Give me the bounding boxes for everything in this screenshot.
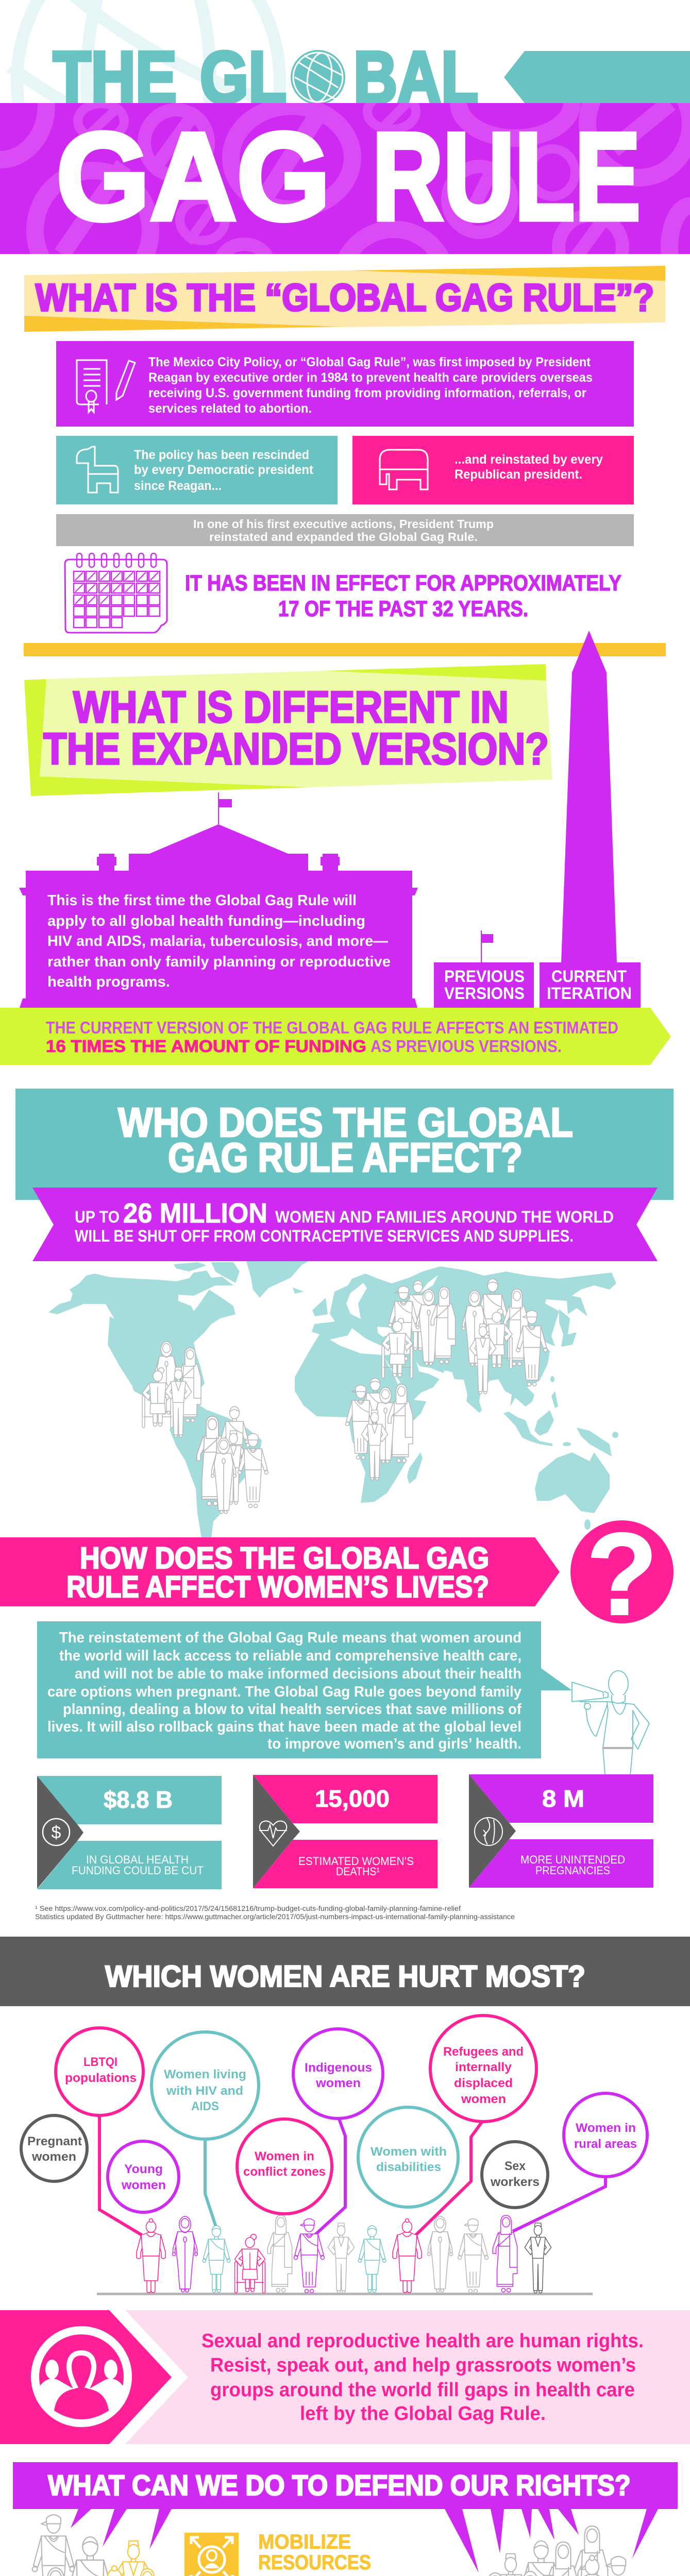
arrow banner: 16 times funding — [0, 1008, 671, 1065]
stat card: pregnancies: 8 M — [542, 1785, 584, 1812]
text: first time: HIV and AIDS, malaria, tuberculosis, and more— — [47, 933, 388, 950]
panel: reinstatement text: and will not be able to make informed decisions about their health — [75, 1666, 521, 1682]
text: reinstated — [455, 452, 603, 482]
icon: donkey — [77, 447, 118, 493]
bubble: lbtqi — [56, 2028, 143, 2115]
bubble: refugees: internally — [455, 2060, 512, 2074]
bubble: hiv: with HIV and — [166, 2084, 243, 2098]
bubble: rural: rural areas — [574, 2137, 637, 2151]
footnote: ¹ See https://www.vox.com/policy-and-politics/2017/5/24/15681216/trump-budget-cuts-funding-global-family-planning-famine-relief — [35, 1904, 461, 1912]
bubble: conflict — [237, 2119, 332, 2214]
text: rescinded — [134, 448, 314, 493]
text: resist speak out: Sexual and reproductive health are human rights. — [201, 2330, 644, 2352]
bubble: pregnant: women — [31, 2150, 76, 2164]
figures: south america — [197, 1406, 268, 1514]
panel: who does it affect: WHO DOES THE GLOBAL — [118, 1099, 573, 1145]
speech banner: what can we do: WHAT CAN WE DO TO DEFEND OUR RIGHTS? — [48, 2469, 631, 2501]
bubble: hiv: AIDS — [191, 2099, 219, 2113]
text: first time — [47, 892, 391, 990]
panel: who does it affect: GAG RULE AFFECT? — [168, 1134, 523, 1180]
figures: asia — [382, 1279, 547, 1394]
arrow banner: how does it affect women's lives — [0, 1537, 560, 1606]
chart: world map with figures — [48, 1261, 618, 1538]
ribbon: 26 million: 26 MILLION — [123, 1198, 267, 1229]
bubble: hiv: Women living — [164, 2067, 246, 2081]
text: resist speak out — [201, 2330, 644, 2425]
stat card: deaths: DEATHS¹ — [336, 1865, 380, 1878]
globe letter O — [291, 50, 345, 105]
figures: gray left group — [32, 2515, 114, 2576]
panel: reinstatement text — [37, 1621, 572, 1758]
bubble: indigenous — [293, 2029, 383, 2119]
text: first time: rather than only family planning or reproductive — [47, 954, 391, 970]
text: mobilize resources — [258, 2531, 426, 2576]
text: resist speak out: left by the Global Gag Rule. — [300, 2403, 546, 2425]
panel: reinstatement text: to improve women’s and girls’ health. — [267, 1736, 521, 1752]
bubble: lbtqi: populations — [65, 2071, 137, 2085]
ribbon tail — [504, 51, 690, 103]
panel: white house building — [19, 792, 418, 1008]
bubble: young: women — [121, 2178, 166, 2192]
heading banner: what is the global gag rule — [24, 266, 665, 332]
chart: obelisk current iteration: CURRENT — [551, 967, 627, 986]
text: 17 of past 32 years — [185, 571, 621, 621]
text: reinstated: ...and reinstated by every — [455, 452, 603, 467]
text: resist speak out: Resist, speak out, and help grassroots women’s — [210, 2354, 636, 2376]
arrow banner: 16 times funding: AS PREVIOUS VERSIONS. — [371, 1037, 562, 1056]
bubble: disabilities — [358, 2107, 458, 2207]
speech banner: what can we do — [13, 2462, 678, 2573]
chart: obelisk current iteration — [540, 631, 641, 1008]
text: reinstated: Republican president. — [455, 467, 582, 482]
stat card: pregnancies: PREGNANCIES — [535, 1864, 610, 1877]
icon: signed document — [77, 360, 135, 412]
banner: human rights — [0, 2310, 690, 2444]
chart: small flag previous versions: VERSIONS — [444, 984, 525, 1003]
bubble: refugees: women — [461, 2092, 506, 2106]
stat card: funding: FUNDING COULD BE CUT — [72, 1864, 204, 1877]
bubble: pregnant — [21, 2115, 87, 2181]
text: first time: apply to all global health funding—including — [47, 913, 365, 929]
ground line — [97, 2293, 593, 2295]
chart: small flag previous versions: PREVIOUS — [444, 967, 525, 986]
bubble: conflict: conflict zones — [243, 2165, 326, 2179]
sign: mobilize resources — [184, 2532, 239, 2576]
icon: elephant — [380, 450, 428, 489]
text: rescinded: The policy has been rescinded — [134, 448, 309, 462]
connectors — [99, 2116, 605, 2235]
panel: democratic presidents — [56, 436, 338, 504]
ribbon: 26 million: WILL BE SHUT OFF FROM CONTRACEPTIVE SERVICES AND SUPPLIES. — [75, 1227, 574, 1245]
text: mobilize resources: MOBILIZE — [258, 2531, 351, 2553]
stat card: pregnancies — [469, 1774, 653, 1888]
chart: obelisk current iteration: ITERATION — [547, 984, 632, 1003]
row of women — [137, 2215, 551, 2293]
figures: north america — [142, 1342, 201, 1437]
icon: dollar — [43, 1819, 70, 1845]
bubble: refugees: Refugees and — [443, 2045, 524, 2059]
ribbon: 26 million: UP TO — [75, 1208, 120, 1226]
bubble: sex workers: workers — [490, 2175, 540, 2189]
bubble: sex workers: Sex — [504, 2159, 526, 2173]
bubble: disabilities: Women with — [371, 2145, 447, 2159]
bubble: refugees — [430, 2015, 536, 2122]
text: rescinded: since Reagan... — [134, 479, 222, 493]
speech spikes — [71, 2509, 658, 2573]
the global letters — [53, 37, 478, 118]
figures: yellow group — [93, 2541, 254, 2576]
text: 17 of past 32 years: IT HAS BEEN IN EFFECT FOR APPROXIMATELY — [185, 571, 621, 596]
stat card: deaths: ESTIMATED WOMEN’S — [298, 1855, 414, 1868]
icon: pregnant belly — [475, 1818, 502, 1845]
heading band: which women are hurt most — [0, 1937, 690, 2006]
bubble: rural — [564, 2093, 647, 2177]
bubble: young: Young — [124, 2162, 163, 2176]
text: rescinded: by every Democratic president — [134, 463, 314, 477]
heading banner: what is different: THE EXPANDED VERSION? — [43, 724, 549, 774]
text: 17 of past 32 years: 17 OF THE PAST 32 YEARS. — [278, 597, 528, 621]
bubble: indigenous: women — [315, 2076, 361, 2090]
icon: question mark — [570, 1509, 674, 1640]
text: policy description — [148, 355, 593, 416]
footnote — [35, 1904, 515, 1921]
text: mobilize resources: RESOURCES — [258, 2551, 371, 2574]
stat card: funding: IN GLOBAL HEALTH — [86, 1853, 189, 1866]
text: policy description: Reagan by executive order in 1984 to prevent health care providers overseas — [148, 370, 593, 385]
panel: mexico city policy — [56, 341, 634, 427]
stat card: funding: $8.8 B — [104, 1786, 173, 1813]
bubble: young — [108, 2141, 179, 2212]
seas — [330, 1275, 443, 1384]
text: policy description: The Mexico City Policy, or “Global Gag Rule”, was first imposed by President — [148, 355, 591, 369]
heading banner: what is different: WHAT IS DIFFERENT IN — [73, 683, 509, 732]
ribbon: 26 million: WOMEN AND FAMILIES AROUND THE WORLD — [275, 1208, 614, 1226]
text: first time: health programs. — [47, 974, 170, 990]
icon: heart — [259, 1821, 287, 1846]
icon: calendar — [65, 553, 167, 633]
stat card: pregnancies: MORE UNINTENDED — [520, 1853, 625, 1866]
stat card: funding — [37, 1776, 222, 1889]
watermark pattern — [0, 103, 690, 254]
heading: gag rule: GAG — [56, 107, 330, 246]
panel: reinstatement text: care options when pregnant. The Global Gag Rule goes beyond family — [47, 1684, 521, 1700]
panel: trump reinstated — [56, 514, 634, 546]
icon: community circle — [35, 2330, 128, 2423]
arrow banner: how does it affect women's lives: HOW DOES THE GLOBAL GAG — [80, 1541, 489, 1575]
watermark globe — [7, 0, 291, 103]
bubble: conflict: Women in — [255, 2149, 314, 2163]
text: first time: This is the first time the Global Gag Rule will — [47, 892, 357, 909]
panel: who does it affect — [15, 1089, 674, 1200]
arrow banner: how does it affect women's lives: RULE AFFECT WOMEN’S LIVES? — [66, 1570, 489, 1604]
panel: reinstatement text: lives. It will also rollback gains that have been made at the global level — [47, 1719, 521, 1735]
panel: trump reinstated: reinstated and expanded the Global Gag Rule. — [209, 530, 478, 544]
the global letters: GL — [200, 37, 287, 118]
bubble: sex workers — [482, 2142, 548, 2208]
panel: trump reinstated: In one of his first executive actions, President Trump — [193, 517, 494, 531]
divider bar — [24, 643, 666, 656]
bubble: lbtqi: LBTQI — [83, 2055, 117, 2069]
map land — [48, 1261, 618, 1538]
icon: dollar: $ — [52, 1823, 61, 1842]
chart: speech bubbles and women — [21, 2015, 647, 2295]
the global letters: BAL — [354, 37, 478, 118]
panel: republican presidents — [352, 436, 634, 504]
footnote: Statistics updated By Guttmacher here: https://www.guttmacher.org/article/2017/05/just-numbers-impact-us-international-family-planning-assistance — [35, 1912, 515, 1921]
bubble: indigenous: Indigenous — [305, 2061, 372, 2075]
figures: right gray group — [443, 2526, 640, 2576]
text: resist speak out: groups around the world fill gaps in health care — [210, 2379, 635, 2401]
ribbon: 26 million — [32, 1188, 658, 1261]
icon: woman with megaphone — [572, 1671, 649, 1775]
text: policy description: services related to abortion. — [148, 401, 312, 416]
bubble: disabilities: disabilities — [376, 2160, 441, 2174]
heading band: which women are hurt most: WHICH WOMEN ARE HURT MOST? — [105, 1960, 585, 1993]
bubble: rural: Women in — [576, 2121, 636, 2135]
stat card: deaths — [253, 1775, 437, 1888]
figures: africa — [345, 1378, 413, 1480]
arrow banner: 16 times funding: 16 TIMES THE AMOUNT OF FUNDING — [46, 1037, 366, 1056]
chart: small flag previous versions — [434, 930, 534, 1008]
bubble: refugees: displaced — [454, 2076, 513, 2090]
icon: question mark: ? — [586, 1509, 658, 1640]
the global letters: THE — [53, 37, 177, 118]
panel: gag rule band — [0, 103, 690, 254]
panel: reinstatement text: the world will lack access to reliable and comprehensive health care, — [59, 1648, 521, 1664]
title: The Global — [7, 0, 690, 103]
text: policy description: receiving U.S. government funding from providing information, referrals, or — [148, 386, 586, 400]
panel: reinstatement text: The reinstatement of the Global Gag Rule means that women around — [59, 1630, 521, 1646]
arrow banner: 16 times funding: THE CURRENT VERSION OF THE GLOBAL GAG RULE AFFECTS AN ESTIMATED — [46, 1018, 618, 1037]
heading: gag rule — [56, 107, 641, 246]
heading banner: what is different — [24, 664, 552, 796]
bubble: hiv — [152, 2032, 259, 2139]
bubble: pregnant: Pregnant — [27, 2134, 82, 2148]
panel: reinstatement text: planning, dealing a blow to vital health services that save millions of — [63, 1701, 521, 1718]
stat card: deaths: 15,000 — [315, 1785, 390, 1812]
